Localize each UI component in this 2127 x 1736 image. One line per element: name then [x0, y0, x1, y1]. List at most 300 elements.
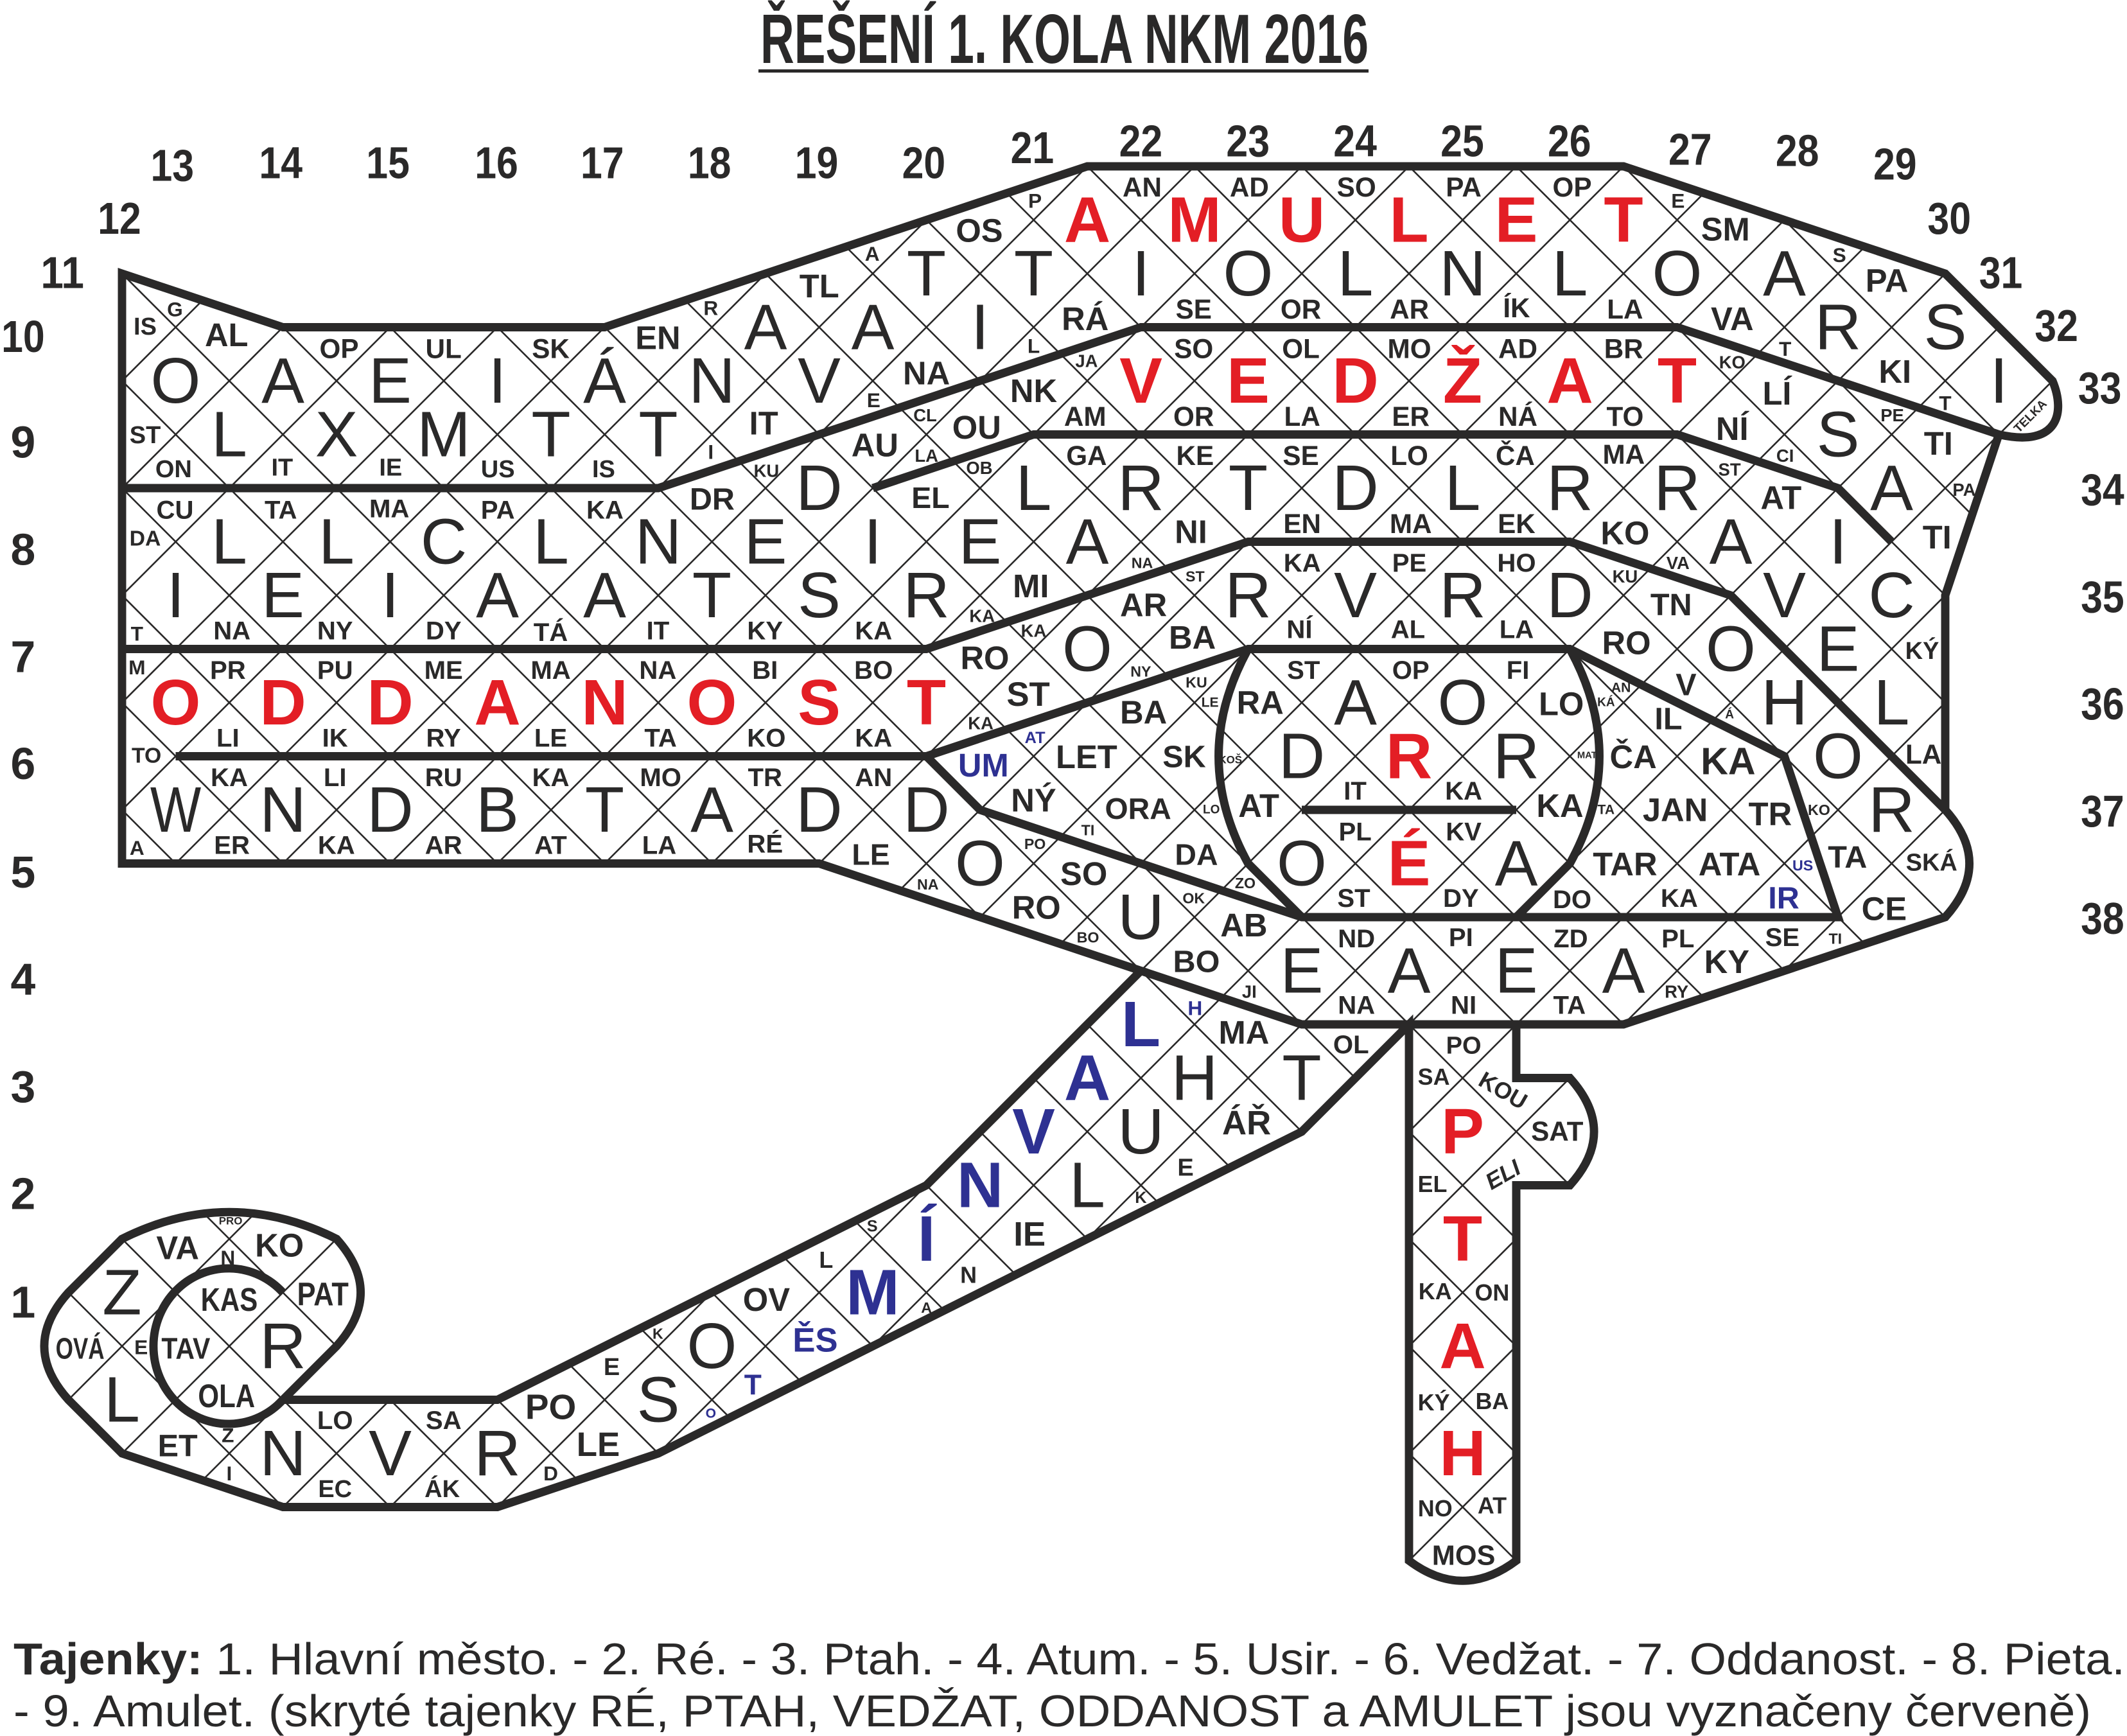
larger syllables: TI	[1924, 425, 1953, 462]
single-letter syllables: A	[130, 836, 144, 859]
medium syllables: SE	[1176, 294, 1212, 324]
big blue letters: HLAVNÍ MĚSTO: A	[1064, 1042, 1110, 1114]
big black letters: L	[533, 506, 569, 578]
small syllables: CI	[1776, 446, 1794, 466]
text: SKÁ	[1906, 848, 1957, 876]
column and row numbers: 6	[11, 739, 35, 789]
text: TA	[1554, 991, 1586, 1020]
text: LO	[1203, 803, 1220, 816]
larger syllables: VA	[156, 1230, 199, 1267]
medium syllables: SK	[532, 333, 570, 364]
solution text: - 9. Amulet. (skryté tajenky RÉ, PTAH, VEDŽAT, ODDANOST a AMULET jsou vyznačeny červeně)	[13, 1686, 2091, 1736]
big black letters: I	[864, 506, 882, 578]
larger syllables: TR	[1749, 796, 1792, 832]
text: NI	[1451, 991, 1476, 1020]
big black letters: A	[690, 774, 733, 846]
big black letters: A	[583, 559, 626, 631]
big black letters: R	[1546, 452, 1593, 524]
text: US	[481, 456, 515, 483]
text: PE	[1392, 548, 1426, 577]
text: BO	[1077, 929, 1099, 946]
single-letter syllables: T	[1779, 337, 1791, 360]
text: ER	[214, 830, 250, 859]
medium syllables: LO	[1390, 441, 1428, 471]
larger syllables: ST	[1006, 676, 1050, 714]
text: IT	[1344, 776, 1367, 805]
column and row numbers: 28	[1776, 125, 1819, 175]
big black letters: U	[1117, 1096, 1164, 1168]
text: SA	[426, 1406, 462, 1435]
larger syllables: KO	[1600, 515, 1649, 552]
text: ST	[130, 422, 161, 449]
small syllables: JI	[1242, 982, 1257, 1002]
larger syllables	[56, 211, 1953, 1464]
big black letters: D	[903, 774, 950, 846]
big black letters: L	[1069, 1150, 1105, 1222]
big black letters: O	[1813, 721, 1863, 793]
medium syllables: MA	[1602, 439, 1645, 469]
big black letters: R	[1439, 559, 1486, 631]
medium syllables: EK	[1498, 509, 1536, 539]
big black letters: I	[167, 559, 184, 631]
single-letter syllables: I	[227, 1462, 232, 1485]
text: HO	[1497, 548, 1536, 577]
text: PR	[210, 656, 246, 685]
medium syllables: SO	[1337, 172, 1376, 202]
single-letter syllables: L	[1028, 335, 1040, 358]
medium syllables: AN	[1123, 172, 1162, 202]
big black letters: V	[1334, 559, 1377, 631]
text: AL	[1391, 615, 1425, 644]
text: PO	[1446, 1033, 1482, 1060]
small blue syllables: US	[1792, 857, 1813, 874]
medium syllables: NÁ	[1498, 401, 1537, 432]
larger syllables: JAN	[1643, 791, 1708, 828]
text: NY	[317, 617, 353, 645]
text: TR	[748, 763, 782, 792]
larger syllables: TA	[1828, 840, 1867, 875]
hidden words in red: AMULET, VEDŽAT, ODDANOST, RÉ, PTAH: O	[151, 667, 200, 739]
text: DY	[426, 617, 462, 645]
text: KA	[1284, 548, 1321, 577]
big black letters: E	[1495, 935, 1537, 1007]
column and row numbers: 11	[40, 248, 84, 298]
big black letters: R	[1225, 559, 1272, 631]
hidden words in red: AMULET, VEDŽAT, ODDANOST, RÉ, PTAH: L	[1389, 184, 1429, 256]
small blue syllables: UM	[958, 747, 1009, 784]
big black letters: R	[1493, 721, 1539, 793]
stem syllables: KÝ	[1418, 1390, 1450, 1416]
single-letter syllables: Ž	[222, 1424, 234, 1447]
text: BO	[854, 656, 893, 685]
big black letters: E	[1281, 935, 1323, 1007]
small blue syllables: IR	[1768, 881, 1799, 915]
larger syllables: TAV	[161, 1332, 210, 1365]
text: KA	[211, 763, 248, 792]
big black letters: A	[1495, 828, 1538, 900]
medium syllables: EN	[1283, 509, 1321, 539]
medium syllables: OP	[320, 333, 359, 364]
text: NA	[213, 617, 250, 645]
single-letter syllables: N	[220, 1246, 235, 1269]
lattice of diagonal cells	[71, 171, 2050, 1558]
stem syllables: KOU	[1475, 1067, 1532, 1114]
big black letters: M	[417, 399, 471, 471]
hidden words in red: AMULET, VEDŽAT, ODDANOST, RÉ, PTAH: A	[1064, 184, 1110, 256]
larger syllables: OV	[743, 1281, 790, 1318]
thick inner divisions	[122, 328, 1999, 1424]
larger syllables: RO	[1602, 625, 1651, 662]
small syllables: OB	[966, 458, 993, 478]
text: KA	[855, 617, 892, 645]
larger syllables: PAT	[297, 1276, 349, 1313]
text: KÁ	[1597, 696, 1615, 710]
larger syllables: ATA	[1699, 846, 1760, 882]
big black letters: L	[1338, 238, 1373, 310]
big black letters: O	[1062, 613, 1112, 685]
larger syllables: BA	[1169, 619, 1216, 656]
big black letters: H	[1171, 1042, 1218, 1114]
big black letters: S	[637, 1364, 679, 1436]
larger syllables: SO	[1060, 855, 1107, 892]
medium syllables: OL	[1282, 333, 1320, 364]
larger syllables: IL	[1654, 701, 1683, 736]
larger syllables: OU	[952, 409, 1001, 446]
big black letters: S	[1924, 292, 1966, 364]
big black letters: A	[261, 345, 304, 417]
medium syllables: MA	[1390, 509, 1432, 539]
column and row numbers: 31	[1979, 248, 2022, 298]
hidden words in red: AMULET, VEDŽAT, ODDANOST, RÉ, PTAH: D	[259, 667, 306, 739]
text: IS	[134, 313, 157, 340]
big black letters: Á	[583, 345, 626, 417]
big black letters: I	[1829, 506, 1847, 578]
larger syllables: NA	[903, 355, 950, 391]
larger syllables: MA	[1218, 1014, 1269, 1051]
larger syllables: BA	[1120, 694, 1167, 730]
big black letters: L	[1445, 452, 1480, 524]
big black letters: O	[1223, 238, 1273, 310]
text: KA	[855, 724, 892, 753]
text: NÍ	[1286, 615, 1313, 644]
text: ST	[1186, 568, 1205, 585]
text: TA	[644, 724, 677, 753]
big black letters	[102, 238, 2008, 1489]
stem syllables: ELI	[1481, 1154, 1525, 1195]
text: KA	[1445, 776, 1482, 805]
big blue letters: HLAVNÍ MĚSTO	[846, 988, 1160, 1328]
text: RY	[426, 724, 461, 753]
small syllables: RY	[1665, 982, 1688, 1002]
text: KÝ	[1905, 636, 1939, 665]
big black letters: T	[1229, 452, 1268, 524]
big black letters: T	[907, 238, 946, 310]
stem syllables	[1418, 397, 2050, 1521]
title	[758, 0, 1369, 78]
small syllables: KO	[1719, 352, 1746, 372]
big black letters: B	[476, 774, 519, 846]
text: KA	[586, 496, 624, 525]
title: ŘEŠENÍ 1. KOLA NKM 2016	[760, 0, 1369, 78]
solution text	[13, 1634, 2125, 1736]
hidden words in red: AMULET, VEDŽAT, ODDANOST, RÉ, PTAH: P	[1441, 1096, 1484, 1168]
text: PI	[1449, 923, 1473, 952]
hidden words in red: AMULET, VEDŽAT, ODDANOST, RÉ, PTAH: T	[907, 667, 946, 739]
text: IT	[271, 455, 293, 482]
crossword grid lines	[40, 162, 2063, 1585]
big black letters: E	[959, 506, 1001, 578]
text: NA	[1132, 555, 1153, 572]
hidden words in red: AMULET, VEDŽAT, ODDANOST, RÉ, PTAH: T	[1443, 1203, 1482, 1275]
text: IS	[592, 456, 615, 483]
larger syllables: KY	[1704, 943, 1749, 980]
larger syllables: OS	[956, 213, 1003, 249]
big black letters: D	[367, 774, 414, 846]
single-letter syllables: N	[960, 1262, 977, 1288]
column and row numbers: 20	[902, 137, 945, 188]
larger syllables: PA	[1866, 263, 1908, 299]
medium syllables: BR	[1604, 333, 1643, 364]
text: SAT	[1531, 1116, 1584, 1146]
larger syllables: TI	[1923, 519, 1952, 556]
big blue letters: HLAVNÍ MĚSTO: N	[957, 1150, 1003, 1222]
column and row numbers: 18	[688, 137, 731, 188]
text: PL	[1661, 924, 1694, 953]
column and row numbers: 32	[2035, 301, 2078, 351]
larger syllables: KAS	[201, 1281, 258, 1318]
big black letters: D	[1546, 559, 1593, 631]
big black letters: X	[315, 399, 358, 471]
larger syllables: AT	[1238, 787, 1279, 824]
text: IE	[379, 455, 402, 482]
stem syllables: SA	[1418, 1064, 1450, 1090]
hidden words in red: AMULET, VEDŽAT, ODDANOST, RÉ, PTAH: U	[1279, 184, 1325, 256]
larger syllables: DR	[690, 482, 735, 516]
text: DO	[1553, 885, 1591, 914]
big black letters: A	[1066, 506, 1109, 578]
small blue syllables: O	[706, 1406, 716, 1421]
larger syllables: AT	[1760, 480, 1801, 516]
column and row numbers: 3	[11, 1062, 35, 1112]
text: E	[1177, 1155, 1194, 1182]
text: IK	[322, 724, 348, 753]
medium syllables: OR	[1281, 294, 1321, 324]
big black letters: L	[319, 506, 354, 578]
medium syllables: AD	[1230, 172, 1269, 202]
small blue syllables: H	[1187, 996, 1202, 1019]
hidden words in red: AMULET, VEDŽAT, ODDANOST, RÉ, PTAH: É	[1388, 828, 1430, 900]
big black letters: C	[421, 506, 467, 578]
big black letters: C	[1868, 559, 1915, 631]
stem syllables: TELKA	[2011, 397, 2050, 435]
big black letters: O	[1652, 238, 1702, 310]
stem syllables: KA	[1419, 1279, 1452, 1304]
larger syllables: KA	[1701, 739, 1756, 782]
single-letter syllables: E	[134, 1335, 148, 1358]
big black letters: U	[1117, 881, 1164, 953]
text: PL	[1338, 817, 1372, 846]
text: LI	[216, 724, 240, 753]
larger syllables: LE	[577, 1426, 620, 1464]
big black letters: R	[1815, 292, 1861, 364]
big black letters: I	[1990, 345, 2008, 417]
big black letters: T	[1014, 238, 1053, 310]
larger syllables: DA	[1175, 838, 1218, 872]
text: ZO	[1235, 875, 1256, 891]
hidden words in red: AMULET, VEDŽAT, ODDANOST, RÉ, PTAH: N	[581, 667, 628, 739]
small blue syllables: T	[744, 1369, 762, 1401]
larger syllables: AB	[1220, 907, 1267, 943]
larger syllables: VA	[1711, 301, 1754, 337]
big black letters: A	[1388, 935, 1431, 1007]
hidden words in red: AMULET, VEDŽAT, ODDANOST, RÉ, PTAH: D	[1332, 345, 1379, 417]
big black letters: D	[1332, 452, 1379, 524]
larger syllables: AR	[1120, 587, 1167, 624]
medium syllables: OP	[1553, 172, 1592, 202]
text: NA	[917, 876, 939, 893]
text: LI	[324, 763, 347, 792]
medium syllables: UL	[426, 333, 462, 364]
single-letter syllables: T	[131, 622, 143, 645]
solution text: Tajenky: 1. Hlavní město. - 2. Ré. - 3. Ptah. - 4. Atum. - 5. Usir. - 6. Vedžat. - 7. Oddanost. - 8. Pieta.	[13, 1634, 2125, 1684]
big black letters: S	[798, 559, 841, 631]
big black letters: O	[955, 828, 1005, 900]
big black letters: S	[1817, 399, 1859, 471]
big blue letters: HLAVNÍ MĚSTO: V	[1012, 1096, 1055, 1168]
column and row numbers: 30	[1927, 193, 1971, 243]
big black letters: I	[1132, 238, 1150, 310]
text: AR	[425, 830, 462, 859]
big black letters: O	[1277, 828, 1327, 900]
medium syllables: PA	[1446, 172, 1482, 202]
big black letters: N	[688, 345, 735, 417]
text: NY	[1130, 663, 1151, 680]
big black letters: T	[1282, 1042, 1322, 1114]
larger syllables: SM	[1701, 211, 1750, 247]
big black letters: A	[1870, 452, 1913, 524]
single-letter syllables: G	[167, 298, 183, 321]
single-letter syllables: E	[867, 389, 880, 412]
hidden words in red: AMULET, VEDŽAT, ODDANOST, RÉ, PTAH: T	[1658, 345, 1697, 417]
larger syllables: NÍ	[1716, 410, 1750, 447]
big black letters: D	[1279, 721, 1325, 793]
text: KV	[1446, 817, 1482, 846]
medium syllables: LA	[1607, 294, 1643, 324]
big black letters: R	[1868, 774, 1915, 846]
column and row numbers: 8	[11, 524, 35, 574]
larger syllables: MI	[1013, 568, 1049, 604]
text: FI	[1507, 656, 1529, 685]
larger syllables: EL	[911, 481, 950, 514]
text: EC	[318, 1476, 352, 1503]
big black letters: A	[1602, 935, 1645, 1007]
small syllables: PE	[1880, 405, 1904, 425]
thick eye outline	[44, 166, 2058, 1581]
big black letters: O	[1706, 613, 1756, 685]
hidden words in red: AMULET, VEDŽAT, ODDANOST, RÉ, PTAH: A	[474, 667, 521, 739]
big black letters: I	[971, 292, 989, 364]
text: CU	[156, 496, 193, 525]
column and row numbers: 27	[1668, 124, 1712, 174]
larger syllables: TN	[1650, 588, 1692, 622]
big black letters: D	[796, 774, 843, 846]
hidden words in red: AMULET, VEDŽAT, ODDANOST, RÉ, PTAH: Ž	[1443, 345, 1482, 417]
text: KO	[1808, 802, 1830, 818]
stem syllables: NO	[1418, 1496, 1453, 1521]
big black letters: L	[104, 1364, 140, 1436]
big black letters: N	[1439, 238, 1486, 310]
text: TÁ	[534, 618, 568, 647]
text: ÁK	[425, 1475, 460, 1503]
text: RU	[425, 763, 462, 792]
larger syllables: PO	[525, 1387, 576, 1426]
larger syllables: OVÁ	[56, 1332, 105, 1365]
column and row numbers: 19	[795, 137, 838, 188]
big black letters: T	[692, 559, 731, 631]
text: NA	[1338, 991, 1375, 1020]
column and row numbers: 14	[259, 137, 302, 188]
small blue syllables	[706, 729, 1813, 1421]
text: IT	[647, 617, 670, 645]
text: SE	[1765, 923, 1799, 952]
larger syllables: NK	[1010, 373, 1057, 409]
hidden words in red: AMULET, VEDŽAT, ODDANOST, RÉ, PTAH: D	[367, 667, 414, 739]
single-letter syllables: R	[703, 296, 718, 319]
text: LE	[1202, 696, 1219, 710]
small syllables	[754, 351, 1976, 1002]
single-letter syllables: K	[1135, 1189, 1147, 1207]
column and row numbers: 16	[475, 137, 518, 188]
larger syllables: RÁ	[1062, 301, 1108, 337]
single-letter syllables	[128, 189, 1952, 1485]
text: TI	[1828, 931, 1842, 947]
big blue letters: HLAVNÍ MĚSTO: L	[1121, 988, 1160, 1060]
larger syllables: CE	[1862, 891, 1907, 927]
big black letters: R	[259, 1310, 306, 1382]
medium syllables: LA	[1284, 401, 1320, 432]
small blue syllables: AT	[1025, 729, 1046, 747]
larger syllables: ÁŘ	[1222, 1103, 1271, 1142]
single-letter syllables: A	[865, 242, 880, 265]
medium syllables: SE	[1282, 441, 1319, 471]
larger syllables: LÍ	[1762, 375, 1792, 412]
text: BI	[752, 656, 778, 685]
single-letter syllables: S	[1833, 243, 1846, 267]
column and row numbers: 10	[1, 311, 45, 362]
larger syllables: IE	[1013, 1216, 1046, 1254]
medium syllables: KE	[1177, 441, 1214, 471]
text: MA	[530, 656, 571, 685]
big black letters: R	[1654, 452, 1701, 524]
text: LO	[317, 1406, 353, 1435]
text: PO	[1024, 836, 1046, 852]
big black letters: N	[259, 1417, 306, 1489]
column and row numbers: 26	[1548, 116, 1591, 166]
text: E	[604, 1354, 620, 1381]
big black letters: I	[489, 345, 506, 417]
big black letters: R	[474, 1417, 521, 1489]
column and row numbers: 24	[1333, 116, 1377, 166]
big black letters: Z	[102, 1257, 142, 1329]
big black letters: E	[369, 345, 412, 417]
text: MA	[369, 495, 409, 523]
big black letters: V	[798, 345, 841, 417]
text: ON	[155, 456, 192, 483]
big black letters: E	[261, 559, 304, 631]
text: KO	[747, 724, 785, 753]
single-letter syllables: E	[1671, 189, 1685, 213]
column and row numbers: 5	[11, 847, 35, 897]
